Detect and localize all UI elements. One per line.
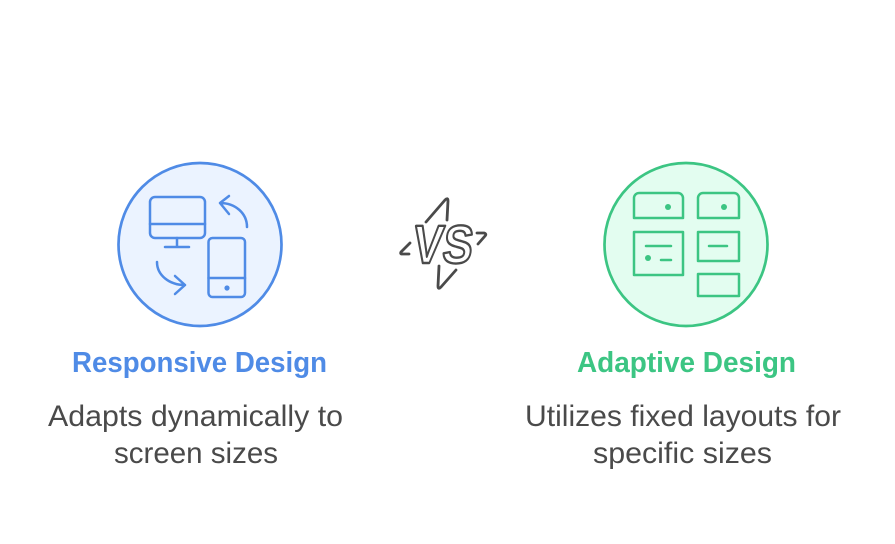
text block: adaptive description: specific sizes — [593, 437, 772, 470]
panel: responsive design — [48, 163, 343, 470]
text block: responsive description — [48, 400, 343, 470]
icon: responsive devices circle — [118, 163, 282, 326]
icon: adaptive layouts circle — [604, 163, 768, 326]
text block: adaptive description — [525, 400, 841, 470]
heading: responsive design: Responsive Design — [72, 347, 327, 379]
panel: adaptive design — [525, 163, 841, 470]
text block: adaptive description: Utilizes fixed layouts for — [525, 400, 841, 433]
icon: versus lightning bolt — [401, 199, 486, 288]
text block: responsive description: Adapts dynamically to — [48, 400, 343, 433]
heading: adaptive design: Adaptive Design — [577, 347, 796, 379]
text block: responsive description: screen sizes — [114, 437, 278, 470]
icon: versus lightning bolt: VS — [410, 215, 477, 275]
